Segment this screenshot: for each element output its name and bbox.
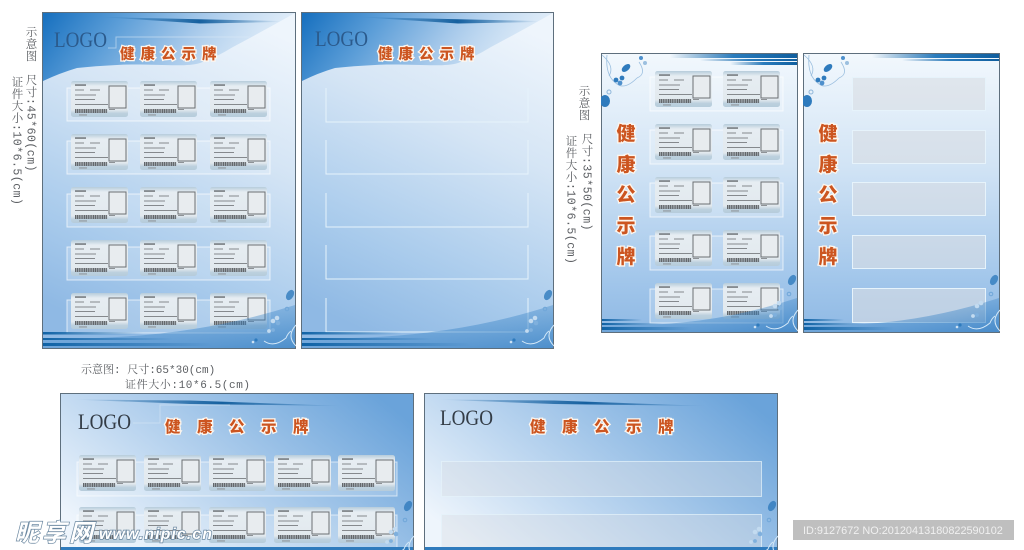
- bottom corner decoration: [43, 288, 296, 348]
- title: 健康公示牌: [165, 417, 325, 436]
- ID cards: [71, 81, 267, 329]
- vertical title: 示: [818, 216, 838, 237]
- bottom corner decoration: [804, 273, 1000, 332]
- bottom corner decoration: [425, 499, 778, 550]
- top lines: [100, 17, 280, 24]
- bottom corner decoration: [602, 273, 798, 332]
- translucent frames: [442, 462, 762, 550]
- title: 健康公示牌: [120, 45, 222, 63]
- top lines: [358, 17, 538, 24]
- corner flourish: [802, 55, 849, 107]
- panel 3: small board with cards: [600, 54, 798, 332]
- logo frame decoration: [108, 37, 250, 48]
- vertical title: 健: [616, 122, 636, 145]
- shelves: [67, 88, 270, 333]
- note: panel set 3 dimensions: 示意图: 尺寸:65*30(cm): [81, 362, 215, 377]
- corner flourish: [600, 55, 647, 107]
- vertical title: 健: [818, 122, 838, 145]
- swoosh header: [43, 13, 295, 81]
- image ID bar: [793, 520, 1014, 540]
- logo: LOGO: [54, 27, 107, 52]
- note: panel set 2 dimensions: 尺寸:35*50(cm): [580, 133, 593, 231]
- panel 5: landscape board with cards: [60, 394, 414, 550]
- panel 1: portrait board with cards: [42, 12, 296, 348]
- bottom corner decoration: [61, 499, 414, 550]
- note: panel set 3 dimensions: [81, 362, 251, 392]
- logo frame decoration: [133, 405, 230, 423]
- note: panel set 2 dimensions: 证件大小:10*6.5(cm): [564, 135, 577, 264]
- vertical title: 牌: [616, 246, 636, 268]
- logo: LOGO: [78, 409, 131, 434]
- panel 4: small board with translucent frames: [802, 54, 1000, 332]
- top band: [872, 54, 999, 61]
- top lines: [436, 400, 709, 406]
- panel 6: landscape board with translucent frames: [424, 394, 778, 550]
- vertical title: 康: [818, 153, 838, 176]
- vertical title: 公: [616, 185, 636, 206]
- translucent frames: [852, 78, 986, 322]
- swoosh header: [302, 13, 553, 81]
- watermark: www.nipic.cn: [99, 526, 212, 543]
- image ID bar: ID:9127672 NO:20120413180822590102: [803, 525, 1003, 537]
- note: panel set 1 dimensions: [10, 26, 37, 205]
- bottom corner decoration: [302, 288, 554, 348]
- empty frames: [326, 88, 528, 332]
- vertical title: 示: [616, 216, 636, 237]
- ID cards: [655, 71, 780, 319]
- title: 健康公示牌: [378, 45, 480, 63]
- top band: [670, 54, 797, 65]
- logo: LOGO: [315, 26, 368, 51]
- note: panel set 1 dimensions: 示意图: [24, 26, 37, 62]
- vertical title: [818, 122, 838, 268]
- watermark: 昵享网: [15, 520, 96, 547]
- shelves: [650, 77, 783, 323]
- note: panel set 1 dimensions: 证件大小:10*6.5(cm): [10, 76, 23, 205]
- note: panel set 3 dimensions: 证件大小:10*6.5(cm): [125, 377, 251, 392]
- top lines: [72, 400, 345, 406]
- vertical title: 康: [616, 153, 636, 176]
- shelves: [77, 462, 397, 550]
- vertical title: [616, 122, 636, 268]
- logo: LOGO: [440, 405, 493, 430]
- vertical title: 公: [818, 185, 838, 206]
- vertical title: 牌: [818, 246, 838, 268]
- watermark: [15, 520, 212, 547]
- title: 健康公示牌: [530, 417, 690, 436]
- panel 2: portrait board with empty frames: [302, 12, 554, 348]
- note: panel set 2 dimensions: 示意图: [576, 85, 590, 121]
- ID cards: [79, 455, 395, 543]
- note: panel set 1 dimensions: 尺寸:45*60(cm): [24, 74, 37, 172]
- note: panel set 2 dimensions: [564, 85, 593, 264]
